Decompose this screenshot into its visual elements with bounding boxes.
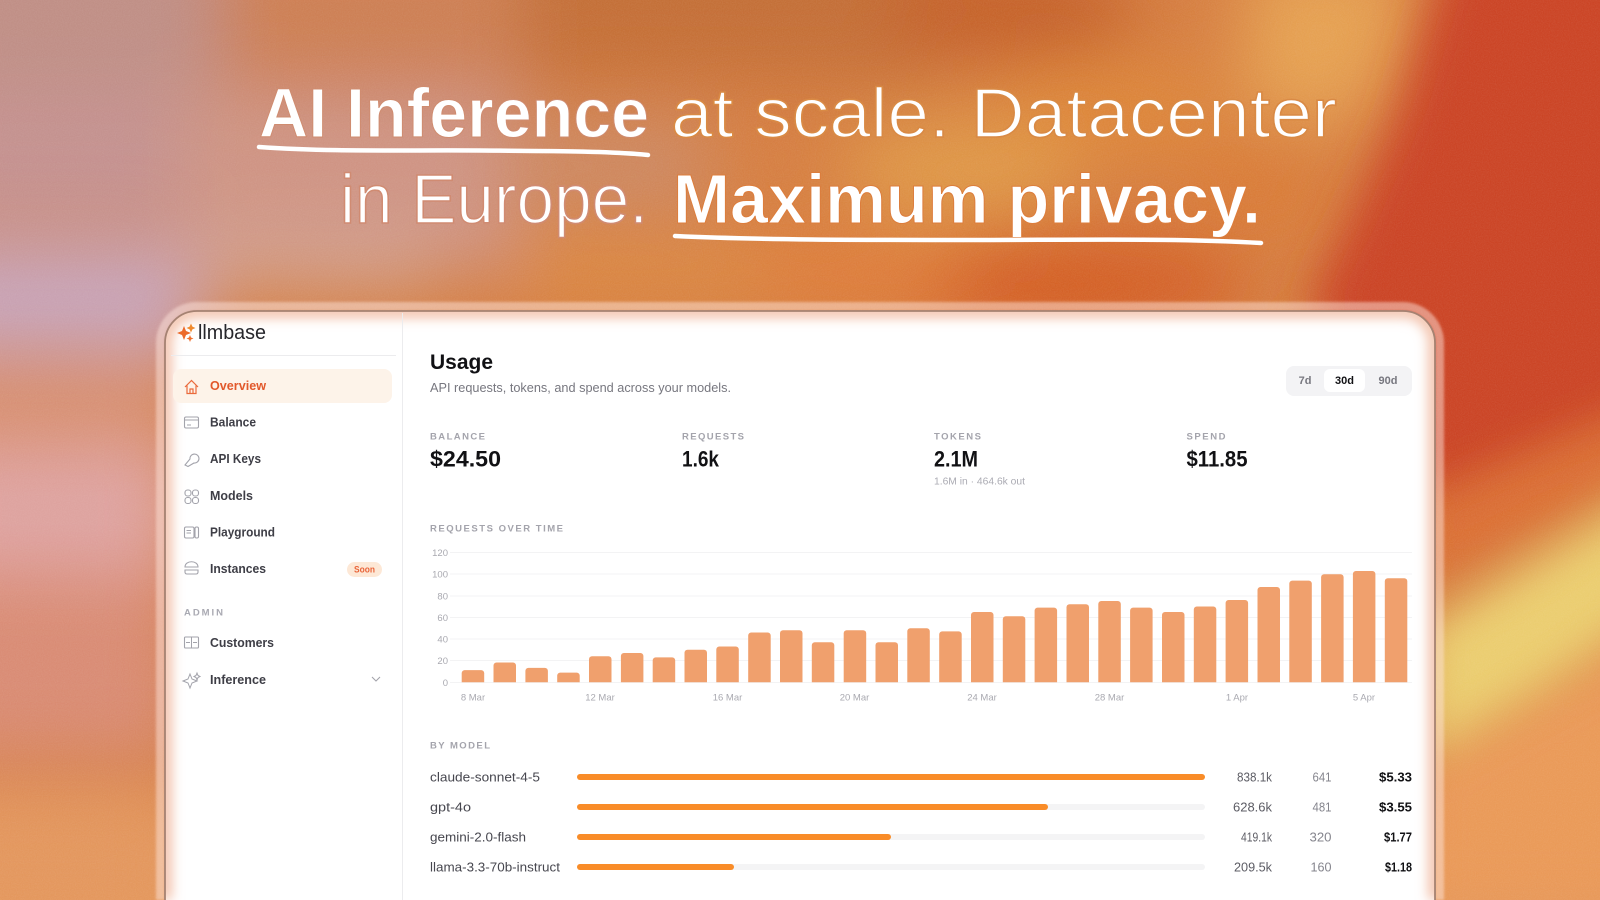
stat: requests [682, 432, 744, 472]
subheading: API requests, tokens, and spend across your models. [430, 381, 731, 395]
model row: llama-3.3-70b-instruct [430, 860, 1412, 874]
bar chart: requests over time: 0 [443, 678, 448, 689]
model row: claude-sonnet-4-5: $5.33 [1379, 770, 1412, 784]
nav: Balance: Balance [210, 414, 256, 430]
model row: gemini-2.0-flash: $1.77 [1384, 830, 1412, 844]
bar chart: requests over time: 16 Mar [713, 692, 742, 704]
heading: by model: BY MODEL [430, 740, 490, 752]
underline: Maximum privacy [675, 236, 1261, 243]
stat: balance: BALANCE [430, 432, 485, 442]
nav: Instances: Instances [210, 561, 266, 576]
model row: gemini-2.0-flash: gemini-2.0-flash [430, 830, 526, 844]
model row: gpt-4o: 481 [1312, 800, 1332, 814]
range toggle: 90d [1379, 375, 1397, 387]
bar chart: requests over time: 1 Apr [1226, 692, 1248, 704]
heading: Usage: Usage [430, 351, 493, 374]
nav: Models [185, 488, 253, 504]
main header [430, 351, 731, 395]
model row: claude-sonnet-4-5: 641 [1312, 770, 1332, 784]
bar chart: requests over time: 20 [437, 656, 448, 667]
dashboard card [160, 306, 1440, 900]
range toggle [1286, 366, 1412, 396]
model row: llama-3.3-70b-instruct: llama-3.3-70b-instruct [430, 860, 561, 874]
stat: spend: SPEND [1186, 432, 1226, 442]
model row: gpt-4o: 628.6k [1233, 800, 1273, 814]
model row: llama-3.3-70b-instruct: 160 [1310, 860, 1332, 874]
stat: spend [1186, 432, 1248, 472]
sidebar [171, 322, 396, 688]
underline: AI Inference [259, 147, 648, 155]
bar chart: requests over time: 24 Mar [967, 692, 997, 704]
model row: gemini-2.0-flash [430, 830, 1412, 844]
stat: tokens [934, 432, 1025, 488]
model row: gpt-4o: $3.55 [1379, 800, 1412, 814]
stat: spend: $11.85 [1186, 446, 1248, 472]
badge: Soon: Soon [354, 564, 375, 574]
bar chart: requests over time: 100 [432, 570, 448, 580]
bar chart: requests over time [432, 548, 1412, 704]
bar chart: requests over time: 40 [437, 634, 448, 646]
bar chart: requests over time: 12 Mar [585, 692, 615, 704]
bar chart: requests over time: 60 [437, 613, 448, 624]
stat: requests: 1.6k [682, 446, 720, 472]
section label: ADMIN: ADMIN [184, 608, 223, 618]
nav: Customers: Customers [210, 635, 274, 650]
title: Maximum privacy.: Maximum privacy. [673, 160, 1261, 238]
title [259, 74, 1337, 243]
model row: llama-3.3-70b-instruct: 209.5k [1234, 860, 1273, 874]
bar chart: requests over time: 5 Apr [1353, 692, 1375, 704]
logo: llmbase [198, 322, 266, 344]
bar chart: requests over time: 28 Mar [1095, 692, 1124, 704]
bar chart: requests over time: 8 Mar [461, 692, 485, 704]
stat: balance: $24.50 [430, 446, 501, 472]
range toggle: 30d [1335, 375, 1354, 387]
nav: Instances [185, 561, 382, 577]
nav: Overview: Overview [210, 378, 267, 393]
icon: chevron [372, 677, 380, 681]
title: AI Inference: AI Inference [259, 74, 649, 152]
model row: gemini-2.0-flash: 320 [1310, 830, 1332, 844]
model row: claude-sonnet-4-5 [430, 770, 1412, 784]
nav: Customers [184, 635, 274, 650]
nav: Balance [184, 414, 256, 430]
model row: gemini-2.0-flash: 419.1k [1241, 830, 1273, 844]
model row: gpt-4o: gpt-4o [430, 800, 471, 814]
range toggle: 7d [1299, 375, 1311, 387]
nav: Overview [173, 369, 392, 403]
title: in Europe.: in Europe. [340, 160, 648, 238]
bar chart: requests over time: 20 Mar [840, 692, 869, 704]
title: at scale. Datacenter: at scale. Datacenter [671, 74, 1337, 152]
nav: API Keys: API Keys [210, 451, 261, 466]
nav: Inference: Inference [210, 672, 266, 687]
model row: llama-3.3-70b-instruct: $1.18 [1385, 860, 1412, 874]
badge: Soon [347, 562, 382, 577]
bar chart: requests over time: 80 [437, 592, 448, 602]
heading: requests over time: REQUESTS OVER TIME [430, 524, 563, 534]
stat: balance [430, 432, 501, 472]
nav: API Keys [185, 451, 261, 466]
nav: Inference [183, 672, 380, 688]
nav: Playground: Playground [210, 524, 275, 540]
stat: requests: REQUESTS [682, 432, 744, 442]
stat: tokens: 1.6M in · 464.6k out [934, 476, 1025, 488]
bar chart: requests over time: 120 [432, 548, 448, 559]
nav: Models: Models [210, 488, 253, 503]
stat: tokens: TOKENS [934, 432, 981, 442]
stat: tokens: 2.1M [934, 446, 978, 472]
model row: claude-sonnet-4-5: 838.1k [1237, 770, 1273, 784]
nav: Playground [184, 524, 275, 540]
model row: claude-sonnet-4-5: claude-sonnet-4-5 [430, 770, 540, 784]
model row: gpt-4o [430, 800, 1412, 814]
